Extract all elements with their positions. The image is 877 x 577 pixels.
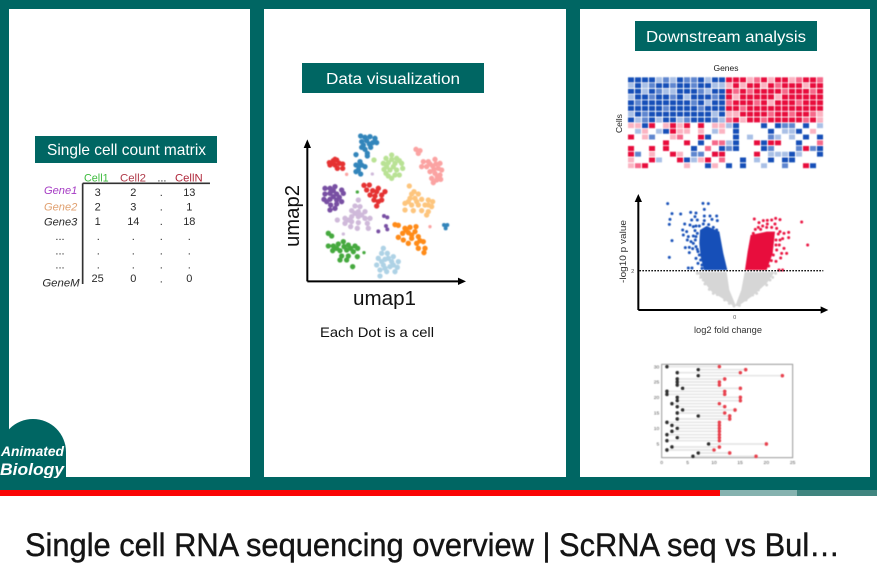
dumbbell plot [654, 364, 796, 466]
count matrix table: Gene3 [44, 216, 77, 228]
threshold line [639, 269, 823, 273]
axis tick labels: 5 [657, 442, 660, 448]
count matrix table: 1 [186, 201, 192, 213]
heatmap: Cells [614, 114, 624, 133]
heading: data visualization [302, 63, 484, 93]
count matrix table: ... [55, 245, 65, 257]
count matrix table: ... [157, 173, 166, 185]
axis tick labels: 0 [660, 460, 663, 466]
count matrix table: . [97, 245, 100, 257]
count matrix table: . [188, 260, 191, 272]
cluster: light orange [405, 186, 433, 215]
count matrix table: . [160, 260, 163, 272]
count matrix table: . [160, 201, 163, 213]
cluster: small purple [378, 216, 387, 231]
count matrix table: 1 [95, 216, 101, 228]
video title: Single cell RNA sequencing overview | ScRNA seq vs Bul… [25, 527, 840, 563]
axis tick labels: 25 [790, 460, 796, 466]
points: up-regulated [745, 232, 775, 270]
cluster: purple [324, 187, 343, 210]
axes [307, 144, 462, 281]
count matrix table: . [188, 231, 191, 243]
count matrix table: . [97, 231, 100, 243]
axis tick labels: 20 [654, 395, 660, 401]
count matrix table: ... [55, 260, 65, 272]
cluster: lavender [337, 200, 370, 228]
logo: Animated Biology: Biology [0, 460, 66, 479]
count matrix table: ... [55, 231, 65, 243]
count matrix table: Cell1 [84, 173, 109, 185]
heading: downstream analysis: Downstream analysis [646, 29, 806, 46]
axis tick labels: 25 [654, 380, 660, 386]
axes [638, 199, 823, 310]
points: down-regulated [699, 226, 727, 270]
cluster: red small [329, 159, 343, 168]
count matrix table: . [97, 260, 100, 272]
axis tick labels: 20 [764, 460, 769, 466]
connecting lines [667, 367, 782, 456]
volcano axis label: x: log2 fold change [694, 325, 762, 335]
points: not significant [697, 272, 775, 306]
points [668, 203, 808, 306]
count matrix table: Gene1 [44, 185, 77, 197]
count matrix table: . [132, 260, 135, 272]
axis tick labels: 10 [654, 426, 660, 432]
count matrix table: . [160, 231, 163, 243]
logo: Animated Biology: Animated [0, 443, 64, 459]
axis tick labels: 15 [654, 411, 660, 417]
count matrix table: 2 [130, 187, 136, 199]
count matrix table: . [160, 187, 163, 199]
axis tick labels [654, 364, 796, 466]
count matrix table: 3 [130, 201, 136, 213]
cluster: light blue [377, 248, 398, 276]
video progress bar [0, 490, 877, 496]
count matrix table: 0 [186, 273, 192, 285]
count matrix table: 25 [92, 273, 104, 285]
count matrix table: 0 [130, 273, 136, 285]
umap scatter plot [304, 136, 466, 285]
volcano axis label: y: -log10 p value [618, 220, 628, 283]
count matrix table: CellN [175, 173, 203, 185]
axis label: umap2: umap2 [282, 185, 304, 247]
axis tick labels: 30 [654, 364, 660, 370]
start points [667, 367, 709, 456]
count matrix table: 18 [183, 216, 195, 228]
axis tick labels: 15 [737, 460, 743, 466]
panel: single cell count matrix [9, 9, 250, 477]
count matrix table [42, 173, 210, 290]
volcano plot: 2 [631, 269, 634, 275]
logo: Animated Biology [0, 419, 66, 478]
count matrix table: . [160, 245, 163, 257]
end points [714, 367, 782, 456]
cluster: blue outlier [444, 225, 447, 228]
caption: Each Dot is a cell [320, 324, 434, 340]
count matrix table: 3 [95, 187, 101, 199]
count matrix table: Cell2 [120, 173, 146, 185]
cluster: green [328, 233, 358, 267]
heading: data visualization: Data visualization [326, 71, 460, 88]
count matrix table: . [160, 274, 163, 286]
stray dots [357, 192, 364, 253]
count matrix table: . [188, 245, 191, 257]
count matrix table: . [160, 216, 163, 228]
heading: downstream analysis [635, 21, 817, 51]
axis tick labels: 10 [711, 460, 717, 466]
cluster: pink [416, 149, 442, 183]
count matrix table: . [132, 231, 135, 243]
axis label: umap1: umap1 [353, 288, 416, 310]
count matrix table: Gene2 [44, 202, 77, 214]
heading: single cell count matrix: Single cell count matrix [47, 142, 206, 159]
heading: single cell count matrix [35, 136, 217, 163]
count matrix table: . [132, 245, 135, 257]
axis tick labels: 5 [686, 460, 689, 466]
heatmap: Genes [713, 63, 739, 73]
cluster: dark blue [356, 136, 377, 174]
count matrix table: 13 [183, 187, 195, 199]
panel: downstream analysis [580, 9, 870, 477]
volcano plot: 0 [733, 315, 736, 321]
count matrix table: GeneM [42, 278, 80, 290]
panel: data visualization [264, 9, 566, 477]
cluster: light green [374, 155, 403, 178]
cluster: red centre [364, 185, 385, 206]
heatmap [614, 63, 824, 166]
count matrix table: 14 [127, 216, 139, 228]
cluster: orange [395, 225, 425, 253]
count matrix table: 2 [95, 201, 101, 213]
volcano plot [631, 194, 828, 321]
